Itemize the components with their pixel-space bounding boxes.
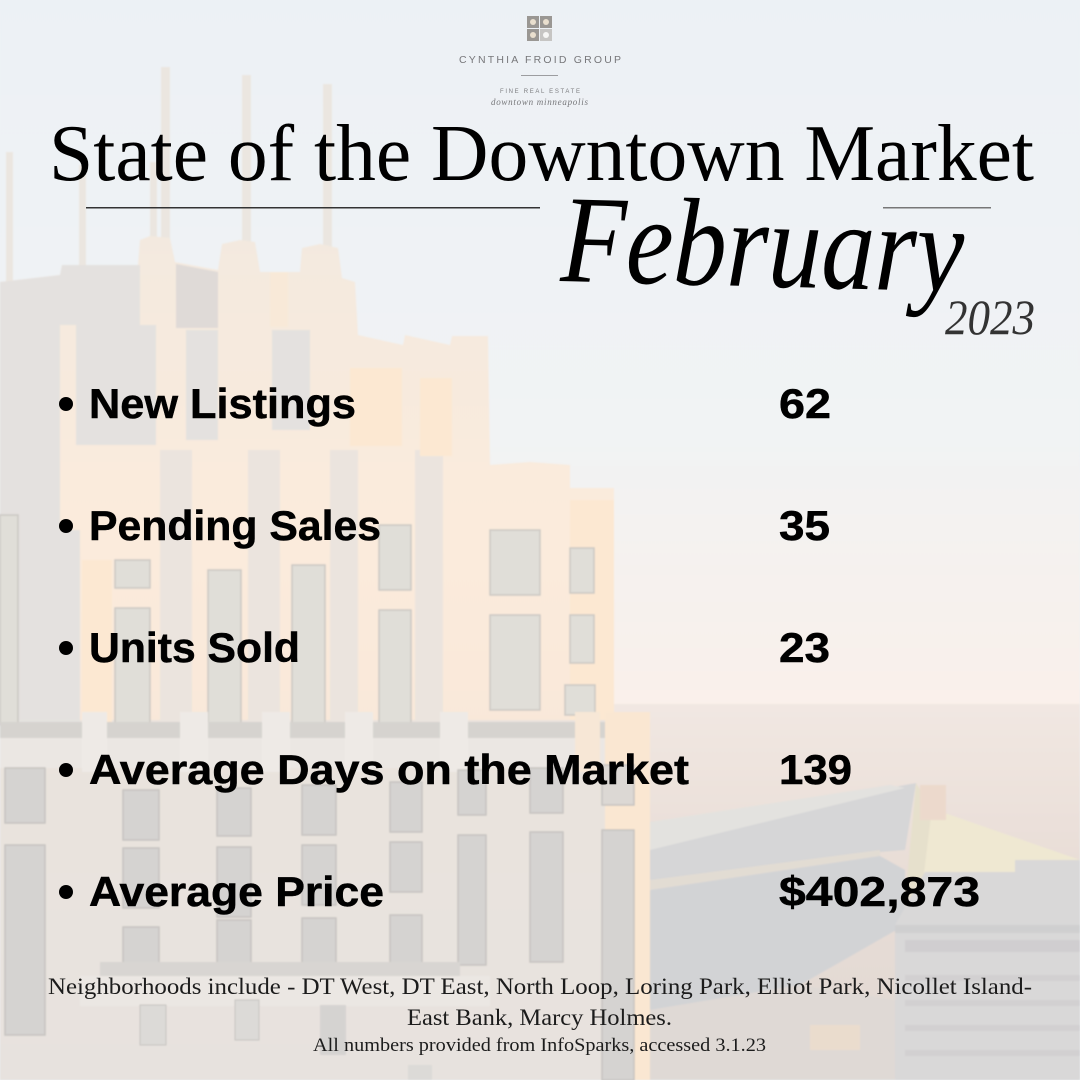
- metric: average price: [59, 868, 980, 915]
- stadium: [650, 783, 1080, 1010]
- logo script line: downtown minneapolis: [491, 97, 588, 107]
- logo mark: [527, 16, 552, 41]
- warm lit bays: [82, 272, 614, 725]
- metric: new listings: [59, 380, 831, 427]
- metric: pending sales: Pending Sales: [89, 502, 381, 549]
- office building right: [895, 860, 1080, 1080]
- metric: pending sales: 35: [779, 502, 830, 549]
- footnote: neighborhoods: East Bank, Marcy Holmes.: [407, 1005, 672, 1031]
- balcony band: [0, 712, 650, 1080]
- metric: new listings: New Listings: [89, 380, 356, 427]
- lower balcony band: [80, 962, 490, 1080]
- metric: units sold: 23: [779, 624, 830, 671]
- metric: units sold: [59, 624, 830, 671]
- brand logo: [459, 16, 621, 107]
- metrics list: [59, 380, 980, 915]
- metric: average days on the market: 139: [779, 746, 852, 793]
- metric: average days on the market: Average Days on the Market: [89, 746, 689, 793]
- footnote: source: All numbers provided from InfoSparks, accessed 3.1.23: [313, 1036, 766, 1056]
- metric: average price: $402,873: [779, 868, 980, 915]
- month script heading: February: [558, 171, 966, 320]
- grey shaded bays: [0, 264, 650, 1080]
- metric: average price: Average Price: [89, 868, 384, 915]
- tower spires: [6, 67, 332, 324]
- tower windows upper: [0, 515, 595, 725]
- low-rise roofs: [650, 985, 895, 1080]
- tower silhouette: [0, 236, 650, 1080]
- year: 2023: [945, 289, 1035, 345]
- footnote: neighborhoods: Neighborhoods include - DT West, DT East, North Loop, Loring Park, Elliot Park, Nicollet Island-: [48, 974, 1032, 1000]
- logo tagline: FINE REAL ESTATE: [500, 89, 580, 95]
- metric: pending sales: [59, 502, 830, 549]
- tower windows lower: [5, 765, 634, 1080]
- title: State of the Downtown Market: [49, 110, 1034, 198]
- metric: new listings: 62: [779, 380, 831, 427]
- metric: units sold: Units Sold: [89, 624, 300, 671]
- footnote: neighborhoods: [48, 974, 1032, 1031]
- distant city haze: [610, 704, 1080, 1080]
- logo name: CYNTHIA FROID GROUP: [459, 54, 621, 66]
